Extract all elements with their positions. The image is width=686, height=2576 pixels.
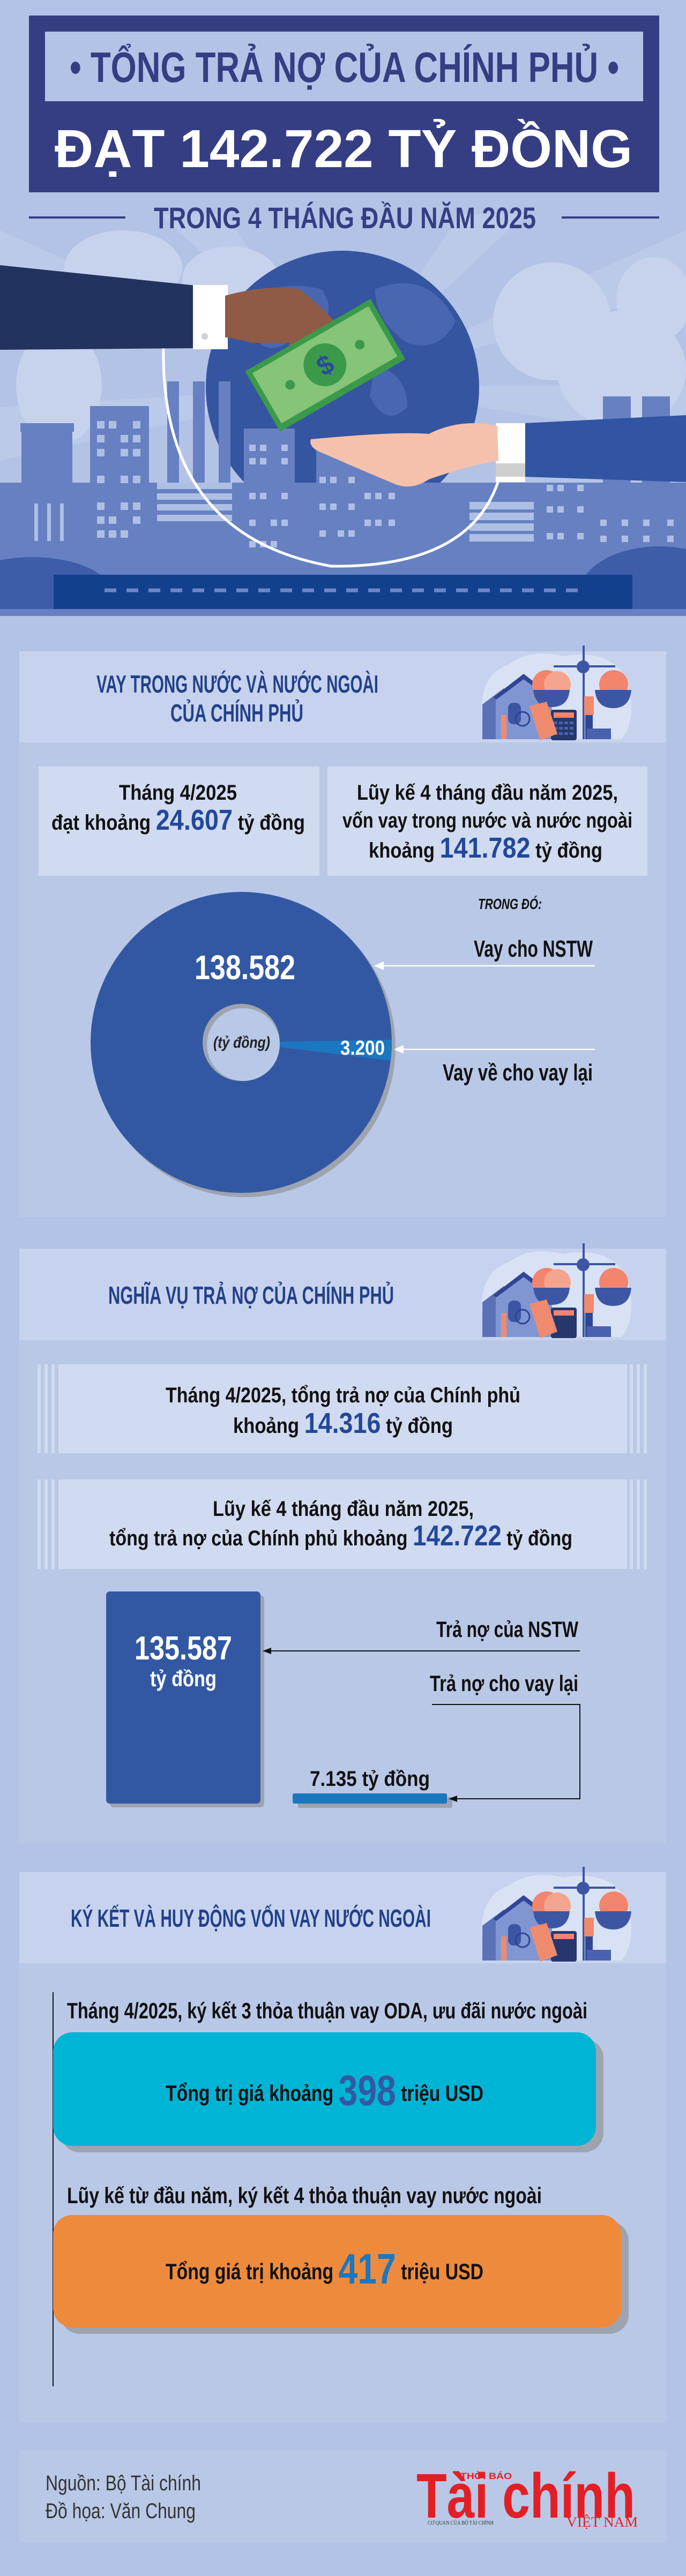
text: luy ke tra no: Lũy kế 4 tháng đầu năm 2025, (213, 1497, 474, 1521)
text: thang 4 tra no: khoảng 14.316 tỷ đồng (233, 1407, 453, 1439)
text: thang 4 tra no: Tháng 4/2025, tổng trả nợ của Chính phủ (166, 1384, 520, 1407)
text: 398 trieu USD (166, 2067, 483, 2114)
title box (29, 16, 659, 192)
label: vay cho NSTW: Vay cho NSTW (474, 936, 593, 962)
box: luy ke (327, 767, 647, 876)
box: thang 4 tra no (38, 1364, 648, 1453)
text: thang 4: Tháng 4/2025 (119, 781, 237, 805)
icon: finance illustration 2 (481, 1243, 631, 1338)
text: 398 trieu USD: Tổng trị giá khoảng (166, 2081, 375, 2106)
panel 3 texts (67, 1904, 587, 2293)
label: tra no NSTW: Trả nợ của NSTW (436, 1617, 578, 1642)
text: 398 trieu USD: triệu USD (396, 2081, 483, 2106)
bar: cho vay lai (293, 1767, 452, 1808)
heading: CỦA CHÍNH PHỦ (170, 699, 303, 727)
panel 1 texts (51, 670, 632, 1086)
hero illustration (0, 214, 686, 616)
text: luy ke: khoảng 141.782 tỷ đồng (369, 832, 602, 864)
title text (29, 43, 659, 235)
source credit: Nguồn: Bộ Tài chính (46, 2472, 201, 2495)
arrow: cho vay lai (394, 1045, 595, 1054)
box: thang 4 (39, 767, 319, 876)
ring (163, 348, 501, 566)
heading: KÝ KẾT VÀ HUY ĐỘNG VỐN VAY NƯỚC NGOÀI (71, 1904, 431, 1932)
heading (96, 670, 378, 727)
text: 398 trieu USD: 398 (339, 2067, 396, 2114)
money: $ (311, 349, 339, 382)
pie chart: (tỷ đồng) (213, 1034, 270, 1052)
legend: trong do: TRONG ĐÓ: (478, 896, 542, 912)
title line 2: ĐẠT 142.722 TỶ ĐỒNG (55, 119, 632, 179)
arrow: cho vay lai (432, 1704, 580, 1802)
heading: VAY TRONG NƯỚC VÀ NƯỚC NGOÀI (96, 670, 378, 698)
box: 398 shadow + fill (53, 2032, 603, 2152)
panel: vay trong nuoc va nuoc ngoai (19, 651, 666, 1217)
text: 417 trieu USD: triệu USD (396, 2259, 483, 2284)
panel: nghia vu tra no (19, 1249, 666, 1843)
logo: THỜI BÁO (460, 2471, 512, 2481)
panel 2 texts and bar chart (106, 1281, 580, 1808)
pie chart: 138.582 (195, 948, 295, 987)
arrow: NSTW (374, 962, 595, 970)
box: 417 shadow + fill (53, 2215, 629, 2334)
box: luy ke tra no (38, 1479, 648, 1569)
globe (206, 251, 479, 524)
header strip (19, 1872, 666, 1963)
pie chart (91, 892, 396, 1197)
bottom band (0, 557, 113, 632)
footer texts and logo (46, 2461, 638, 2532)
text: thang 4 tra no (166, 1384, 520, 1439)
text: luy ke: Lũy kế từ đầu năm, ký kết 4 thỏa thuận vay nước ngoài (67, 2183, 542, 2208)
footer panel (19, 2450, 666, 2542)
icon: finance illustration 1 (481, 645, 631, 740)
label: tra no cho vay lai: Trả nợ cho vay lại (430, 1671, 578, 1696)
text: 417 trieu USD: Tổng giá trị khoảng (166, 2259, 375, 2284)
text: thang 4 (51, 781, 305, 836)
text: 417 trieu USD: 417 (339, 2245, 396, 2293)
panel: ky ket va huy dong von (19, 1872, 666, 2422)
logo: Tài chính (416, 2461, 635, 2532)
text: luy ke (342, 781, 632, 864)
source credit: Đồ họa: Văn Chung (46, 2499, 196, 2523)
header strip (19, 1249, 666, 1340)
title line 1 box (45, 32, 643, 101)
bar: cho vay lai: 7.135 tỷ đồng (310, 1767, 430, 1791)
left arm (0, 265, 196, 350)
text: thang 4: đạt khoảng 24.607 tỷ đồng (51, 804, 305, 836)
header strip (19, 651, 666, 742)
arrow: NSTW (263, 1648, 580, 1654)
pie chart: 3.200 (340, 1037, 385, 1060)
bar: NSTW: tỷ đồng (150, 1666, 217, 1691)
logo: VIỆT NAM (566, 2514, 638, 2530)
bar: NSTW (106, 1591, 264, 1807)
text: 417 trieu USD (166, 2245, 483, 2293)
source credit (46, 2472, 201, 2523)
city (0, 381, 686, 579)
right arm (524, 415, 686, 482)
slice 3.200 (241, 1040, 392, 1061)
logo: CƠ QUAN CỦA BỘ TÀI CHÍNH (428, 2520, 494, 2526)
money (245, 299, 405, 432)
vertical line (53, 1992, 54, 2386)
subtitle: TRONG 4 THÁNG ĐẦU NĂM 2025 (154, 201, 536, 235)
text: luy ke tra no: tổng trả nợ của Chính phủ khoảng 142.722 tỷ đồng (109, 1520, 572, 1552)
heading: NGHĨA VỤ TRẢ NỢ CỦA CHÍNH PHỦ (108, 1281, 394, 1309)
bar: NSTW: 135.587 (135, 1630, 232, 1667)
text: luy ke: Lũy kế 4 tháng đầu năm 2025, (357, 781, 618, 805)
label: vay ve cho vay lai: Vay về cho vay lại (443, 1060, 593, 1086)
icon: finance illustration 3 (481, 1867, 631, 1962)
text: luy ke tra no (109, 1497, 572, 1552)
